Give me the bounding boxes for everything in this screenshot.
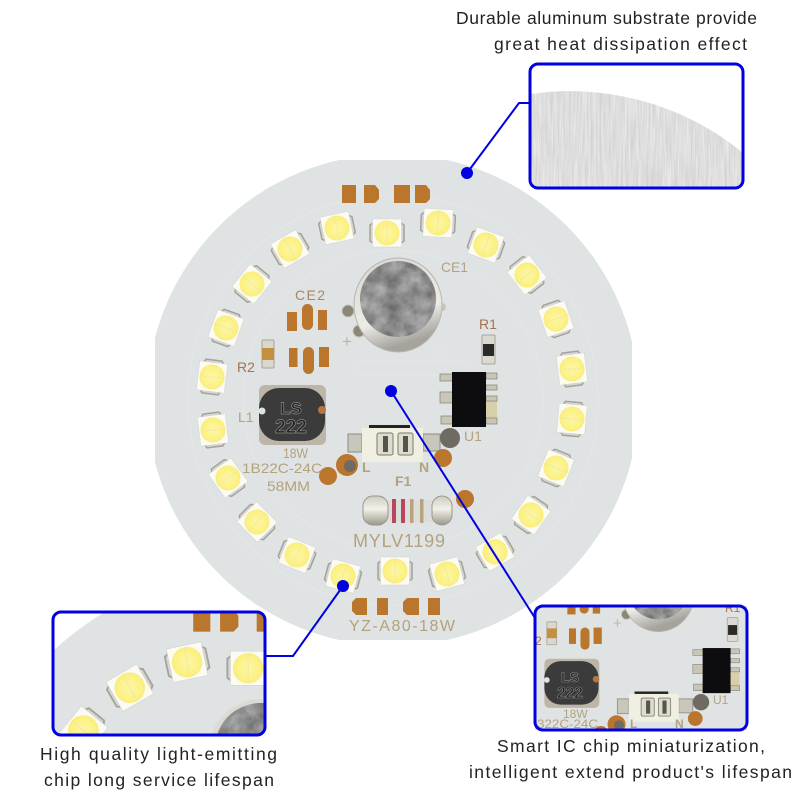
inset markings [557,672,582,698]
inset markings: 222 [557,685,583,702]
bottom solder pads [352,598,440,615]
label 58MM: 58MM [267,478,310,494]
magnified capacitor [211,699,265,735]
brushed aluminum texture [531,91,742,187]
LED ring [196,208,588,594]
capacitor CE1 [342,258,446,352]
label 18W: 18W [283,445,309,461]
plus mark: + [342,332,352,351]
inductor L1 [258,385,326,445]
board silkscreen labels [237,259,497,635]
top solder pads [342,185,430,203]
inset labels: 2 [535,634,542,648]
label CE1: CE1 [441,259,468,275]
caption: IC chip [469,736,792,782]
caption: IC chip: Smart IC chip miniaturization, [497,736,765,756]
inset labels: U1 [713,693,729,707]
LED circuit board [147,154,639,646]
inset labels: + [613,615,622,632]
CE2 pads [287,304,329,374]
IC chip U1 [440,372,497,427]
leader: substrate callout [461,103,530,179]
callout panel: LED close-up [52,610,266,736]
magnified board area [53,612,265,735]
inset markings: LS [561,669,579,685]
connector [348,425,440,462]
inset labels: R1 [725,601,741,615]
caption: substrate [456,8,757,54]
inset labels: 322C-24C [537,717,598,731]
inset labels: N [675,717,684,731]
reduced board view [544,608,740,728]
inset labels [535,601,741,731]
caption: substrate: Durable aluminum substrate provide [456,8,757,28]
label R2: R2 [237,359,255,375]
marking LS: LS [280,399,302,418]
resistor R1 [482,335,495,364]
label U1: U1 [464,428,482,444]
marking 222: 222 [275,417,307,438]
solder joints [319,428,474,508]
leader: LED callout [265,580,349,656]
label CE2: CE2 [295,287,325,303]
inductor marking [275,399,307,438]
label YZ-A80-18W: YZ-A80-18W [349,618,456,635]
caption: substrate: great heat dissipation effect [494,34,747,54]
leader: IC callout [385,385,535,618]
inset labels: 18W [563,707,588,721]
callout panel: IC close-up [534,604,748,732]
caption: LED chip: chip long service lifespan [44,770,274,790]
fuse F1 [363,496,452,525]
caption: LED chip: High quality light-emitting [40,744,277,764]
caption: IC chip: intelligent extend product's lifespan [469,762,792,782]
inset labels: L [630,717,637,731]
label 1B22C-24C: 1B22C-24C [242,460,322,476]
label F1: F1 [395,473,412,489]
copper traces [188,195,598,605]
label N: N [419,459,429,475]
magnified pads and LEDs [59,614,264,734]
label MYLV1199: MYLV1199 [353,531,445,551]
caption: LED chip [40,744,277,790]
resistor R2 [262,340,274,368]
aluminum board [147,154,639,646]
label R1: R1 [479,316,497,332]
callout panel: aluminum substrate [530,64,743,188]
label L: L [362,459,371,475]
label L1: L1 [238,409,254,425]
